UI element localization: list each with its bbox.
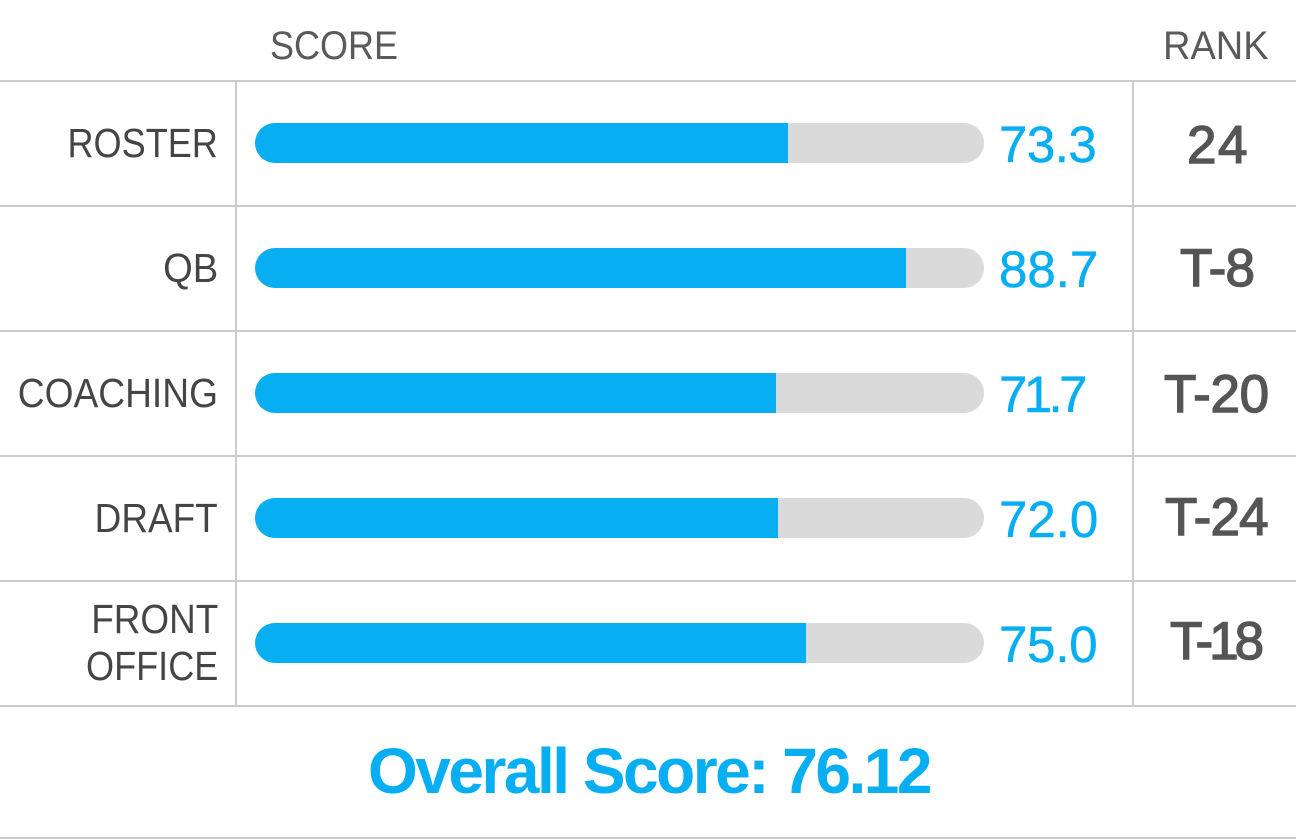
row: roster: [68, 116, 1249, 175]
row: coaching: [18, 365, 1269, 424]
bar: roster: [255, 123, 984, 163]
label: draft: DRAFT: [95, 495, 218, 541]
rank: coaching: T-20: [1164, 365, 1269, 424]
rank: front office: T-18: [1170, 612, 1260, 671]
bar: coaching: [255, 373, 984, 413]
bar: front office: [255, 623, 984, 663]
score: roster: 73.3: [999, 116, 1096, 173]
label: front office: [86, 596, 218, 689]
bar: draft: [255, 498, 984, 538]
label: roster: ROSTER: [68, 120, 218, 166]
score: draft: 72.0: [999, 491, 1098, 548]
label: front office: OFFICE: [86, 643, 218, 689]
label: front office: FRONT: [91, 596, 218, 642]
rank: roster: 24: [1187, 116, 1249, 175]
overall score: Overall Score: 76.12: [368, 735, 930, 807]
label: coaching: COACHING: [18, 370, 218, 416]
rank: qb: T-8: [1180, 239, 1254, 298]
bar: qb: [255, 248, 984, 288]
score: qb: 88.7: [999, 241, 1098, 298]
label: qb: QB: [163, 245, 218, 291]
row: draft: [95, 488, 1268, 548]
score: front office: 75.0: [999, 616, 1097, 673]
rank: draft: T-24: [1165, 488, 1268, 547]
column heading: rank: RANK: [1163, 24, 1269, 68]
row: front office: [86, 596, 1262, 689]
score: coaching: 71.7: [999, 366, 1084, 423]
column heading: score: SCORE: [270, 24, 398, 68]
row: qb: [163, 239, 1254, 298]
